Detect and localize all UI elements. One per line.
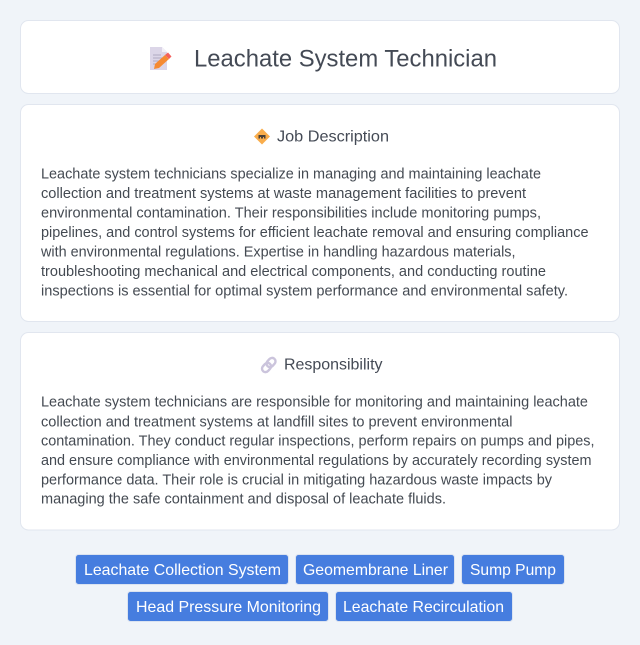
text block: responsibility: performance data. Their role is crucial in mitigating hazardous waste impacts by xyxy=(41,472,553,488)
heading: job description: Job Description xyxy=(277,128,389,146)
tag: Head Pressure Monitoring xyxy=(128,592,328,622)
text block: job description: collection and treatment systems at waste management facilities to prevent xyxy=(41,186,526,202)
text block: job description xyxy=(40,166,588,300)
text block: job description: troubleshooting mechanical and electrical components, and conducting routine xyxy=(41,264,546,280)
panel: responsibility xyxy=(20,332,620,530)
text block: responsibility: and ensure compliance with environmental regulations by accurately recording system xyxy=(41,453,592,469)
icon: warning diamond xyxy=(254,128,270,144)
text block: responsibility xyxy=(41,394,594,508)
tag: Sump Pump: Sump Pump xyxy=(470,562,556,579)
title text: Leachate System Technician xyxy=(194,46,497,72)
text block: job description: pipelines, and control systems for efficient leachate removal and ensuring compliance xyxy=(41,225,588,241)
text block: responsibility: managing the safe containment and disposal of leachate fluids. xyxy=(41,492,446,508)
icon: chain link xyxy=(261,356,277,374)
tag: Head Pressure Monitoring: Head Pressure Monitoring xyxy=(136,599,321,616)
tag: Geomembrane Liner: Geomembrane Liner xyxy=(303,562,449,579)
tag: Leachate Collection System xyxy=(76,554,288,584)
text block: responsibility: Leachate system technicians are responsible for monitoring and maintaining leachate xyxy=(41,394,588,410)
icon: document with pencil xyxy=(150,47,172,70)
text block: job description: with environmental regulations. Expertise in handling hazardous materials, xyxy=(40,244,516,260)
panel: title xyxy=(20,20,620,94)
text block: responsibility: collection and treatment systems at landfill sites to prevent environmental xyxy=(41,414,512,430)
tag: Leachate Recirculation: Leachate Recirculation xyxy=(343,599,504,616)
tag: Leachate Recirculation xyxy=(336,592,512,622)
tag: Leachate Collection System: Leachate Collection System xyxy=(84,562,281,579)
panel: job description xyxy=(20,104,620,322)
heading: responsibility: Responsibility xyxy=(284,356,382,374)
text block: job description: inspections is essential for optimal system performance and environmental safety. xyxy=(41,284,568,300)
text block: responsibility: contamination. They conduct regular inspections, perform repairs on pumps and pipes, xyxy=(41,434,594,450)
tag: Geomembrane Liner xyxy=(296,554,454,584)
text block: job description: Leachate system technicians specialize in managing and maintaining leachate xyxy=(41,166,541,182)
tag: Sump Pump xyxy=(462,554,564,584)
text block: job description: environmental contamination. Their responsibilities include monitoring pumps, xyxy=(41,206,541,222)
